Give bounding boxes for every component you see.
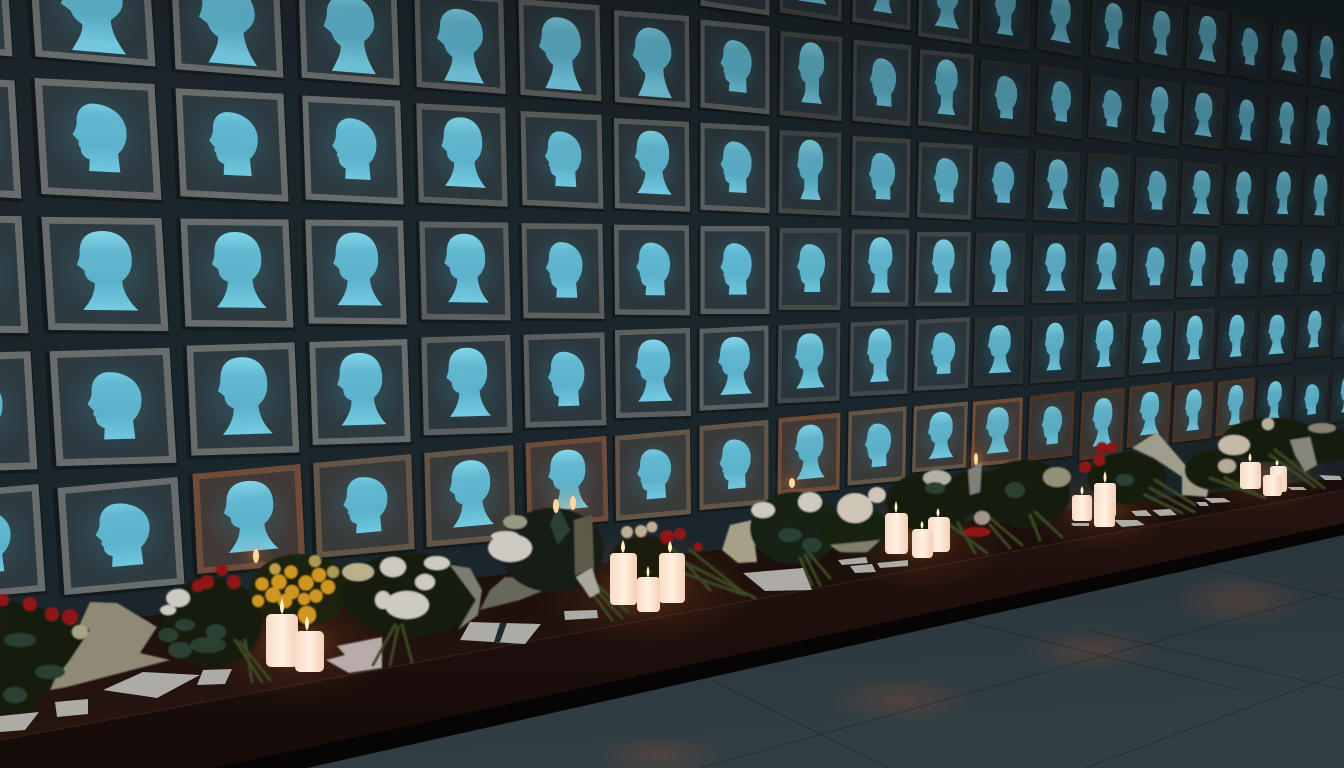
bouquet: red roses with white paper wrap [1079, 432, 1209, 513]
column of frames 4 [411, 0, 517, 550]
bouquet: roses with long stems behind candles [610, 522, 755, 598]
bouquet: yellow roses [250, 554, 350, 626]
column of frames 8 [775, 0, 843, 498]
column of frames 13 [1077, 0, 1136, 463]
candle group right [1072, 471, 1116, 527]
column of frames 14 [1125, 0, 1184, 450]
column of frames 2 [166, 0, 307, 577]
shadow falling over the top-right wall [0, 0, 1344, 400]
column of frames 17 [1254, 19, 1308, 432]
warm candle glow on wall and ledge [195, 438, 1327, 705]
column of frames 6 [611, 10, 692, 524]
bouquets: white flowers with red accents, centre right [886, 460, 1071, 553]
portrait wall: framed glowing silhouettes [0, 0, 1344, 606]
candle group left [266, 598, 324, 672]
column of frames 12 [1025, 0, 1084, 463]
bouquet: red roses and eucalyptus [158, 564, 270, 682]
memorial ledge [0, 477, 1344, 768]
column of frames 16 [1213, 12, 1269, 439]
column of frames 3 [294, 0, 416, 561]
candle group far right [1240, 453, 1287, 496]
column of frames 11 [969, 0, 1032, 469]
candle reflections in the frame glass [253, 453, 978, 563]
bouquet: lily with wrapped stems [480, 505, 628, 620]
bouquet: white flowers and lily [722, 487, 890, 585]
column of cropped frames at far left [0, 0, 47, 606]
bouquet: white lilies [326, 553, 482, 673]
column of frames 9 [845, 0, 912, 488]
remembrance cards on the ledge [0, 475, 1342, 732]
candle group centre [610, 540, 685, 612]
column of frames 15 [1170, 4, 1228, 445]
column of frames 1 [24, 0, 186, 599]
column of cropped frames at far right [1328, 168, 1344, 425]
column of frames 10 [910, 0, 975, 475]
candles [266, 453, 1287, 672]
bouquets: lilies and wrapped flowers, far right [1185, 418, 1344, 498]
column of frames 7 [697, 0, 770, 513]
bouquet: red roses in beige paper, far left [0, 594, 170, 716]
floor with tile joints [300, 530, 1344, 768]
candle group centre right [885, 501, 950, 558]
column of frames 5 [515, 0, 609, 531]
column of frames 18 [1292, 26, 1344, 430]
